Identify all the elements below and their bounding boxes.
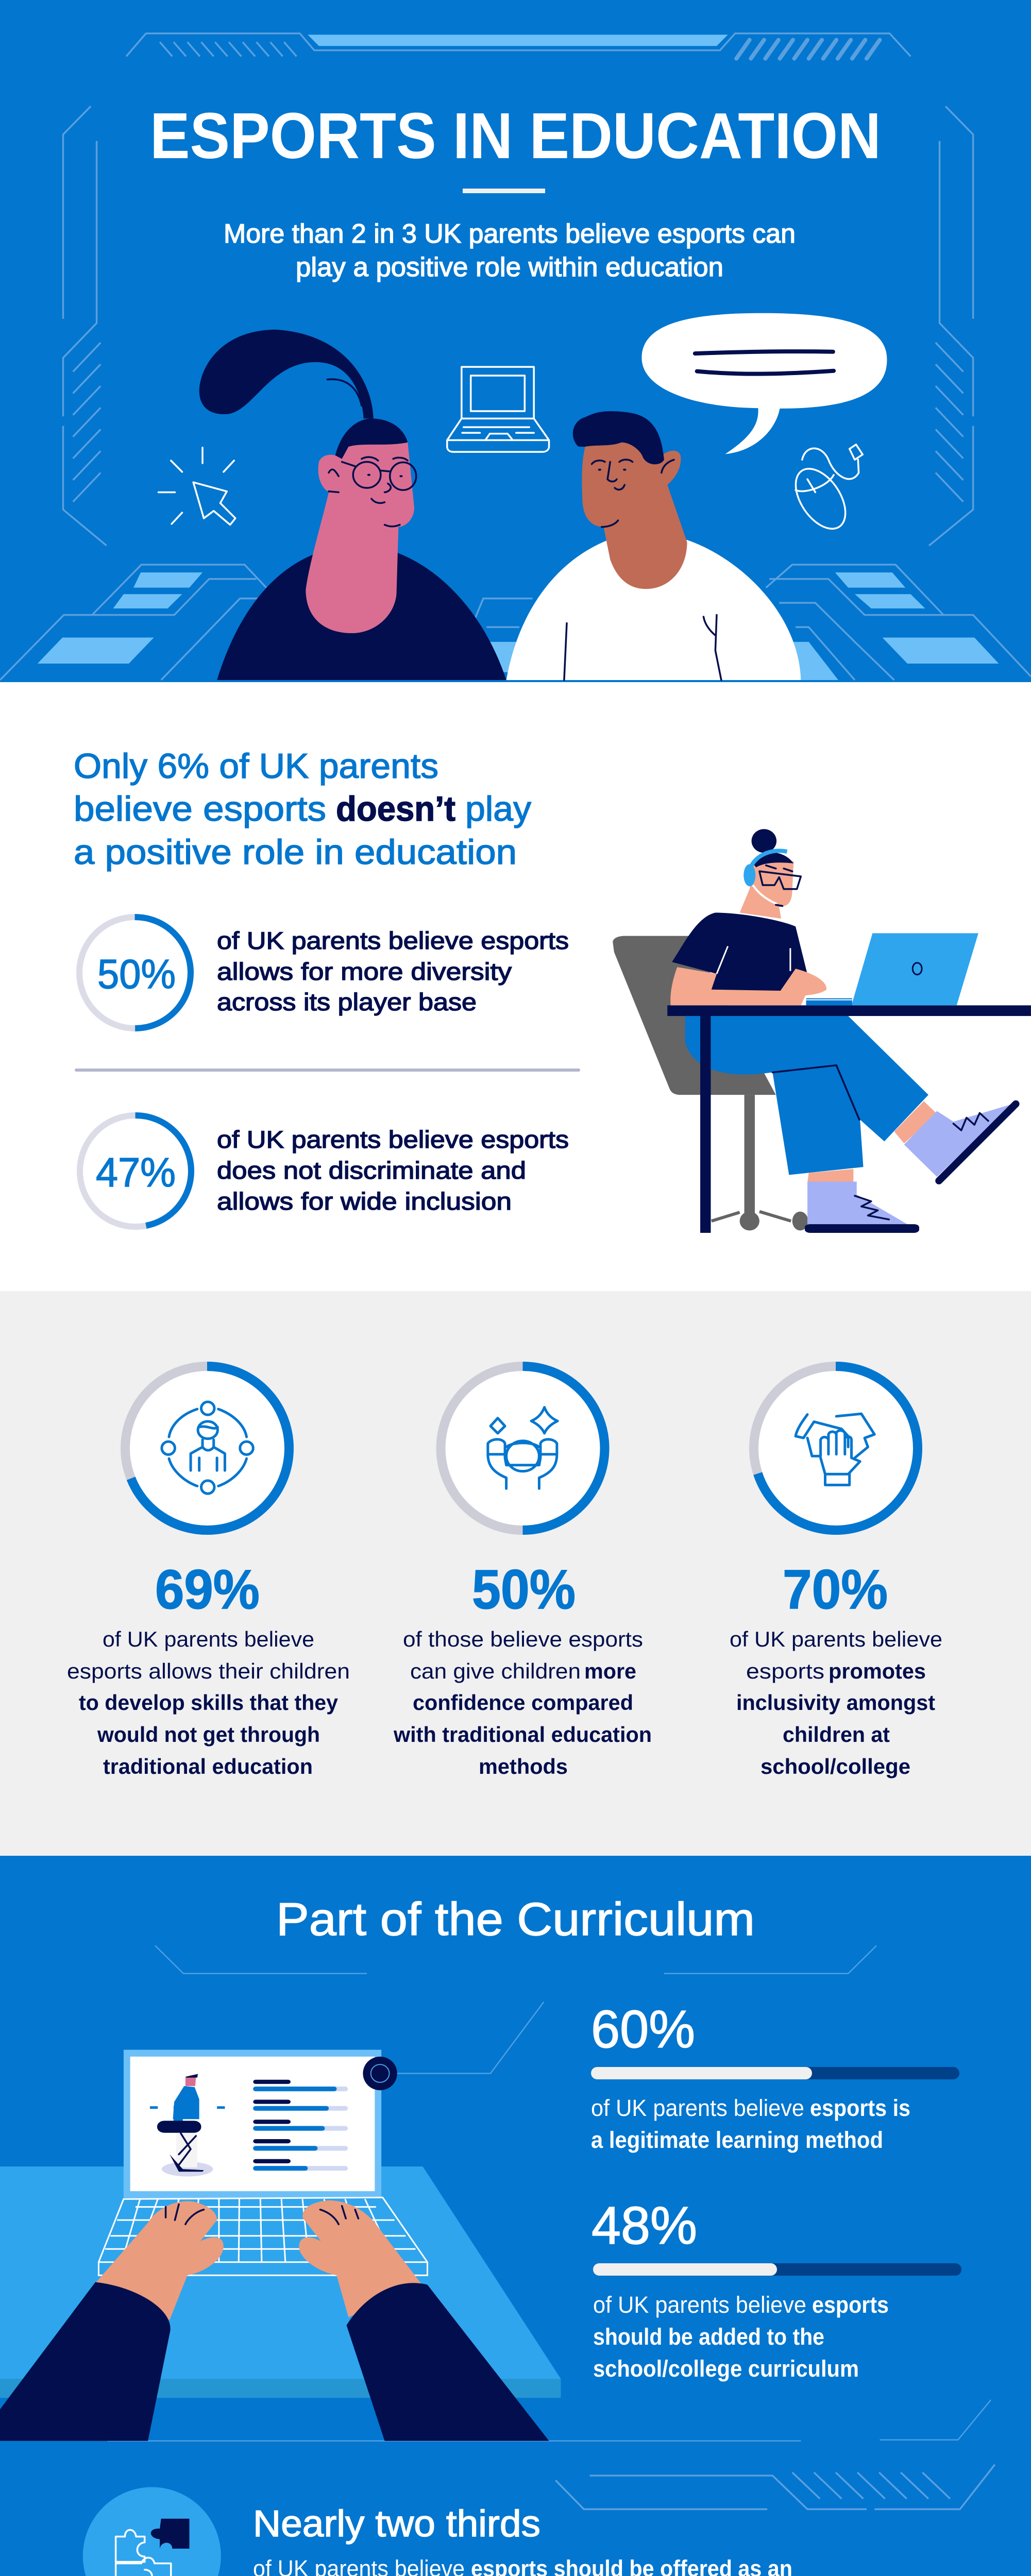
stat: 60% legitimate	[591, 1999, 959, 2153]
panel: header	[0, 0, 1031, 682]
stat: 69% develop skills: 69%	[155, 1558, 260, 1620]
stat: 48% curriculum: 48%	[591, 2196, 697, 2255]
stat: 70% inclusivity: promotes	[829, 1659, 926, 1683]
heading: Part of the Curriculum	[276, 1894, 755, 1945]
heading: believe esports	[74, 789, 326, 828]
stat: 70% inclusivity: esports	[746, 1659, 824, 1683]
stat: 70% inclusivity: children at	[783, 1722, 890, 1747]
icon: mouse	[786, 445, 863, 533]
laptop screen chart	[150, 2057, 397, 2176]
callout: nearly two thirds	[83, 2487, 792, 2576]
icon: laptop	[447, 367, 549, 452]
title underline	[463, 189, 545, 193]
stat: 60% legitimate: of UK parents believe	[591, 2095, 804, 2121]
heading: doesn’t	[336, 789, 455, 828]
heading: a positive role in education	[74, 833, 517, 872]
stat: 69% develop skills: would not get through	[97, 1722, 320, 1747]
stat: 70% inclusivity: of UK parents believe	[730, 1627, 942, 1651]
stat: 47% inclusion: 47%	[96, 1149, 176, 1195]
subtitle: More than 2 in 3 UK parents believe esports can	[224, 219, 796, 249]
heading: Only 6% of UK parents	[74, 747, 438, 786]
stat: 47% inclusion	[80, 1115, 569, 1227]
stat: 48% curriculum: school/college curriculum	[593, 2355, 859, 2382]
stat: 50% diversity	[79, 917, 569, 1028]
illustration: woman with ponytail	[199, 330, 506, 680]
stat: 50% confidence	[393, 1366, 652, 1778]
stat: 47% inclusion: of UK parents believe esports	[217, 1126, 569, 1153]
stat: 50% diversity: across its player base	[217, 988, 477, 1015]
stat: 70% inclusivity: inclusivity amongst	[736, 1690, 935, 1715]
stat: 47% inclusion: does not discriminate and	[217, 1157, 526, 1184]
stat: 60% legitimate: 60%	[591, 1999, 695, 2059]
stat: 50% confidence: methods	[479, 1754, 568, 1778]
heading	[74, 747, 531, 872]
panel: grey stats	[0, 1291, 1031, 1856]
illustration: hands on laptop	[0, 2050, 561, 2441]
illustration: woman at laptop in chair	[613, 829, 1031, 1233]
stat: 50% confidence: of those believe esports	[403, 1627, 643, 1651]
stat: 48% curriculum	[591, 2196, 961, 2382]
stat: 48% curriculum: should be added to the	[593, 2324, 824, 2350]
illustration: man with short hair	[506, 411, 801, 680]
stat: 69% develop skills: traditional education	[103, 1754, 313, 1778]
stat: 47% inclusion: allows for wide inclusion	[217, 1188, 512, 1215]
subtitle	[224, 219, 796, 282]
stat: 69% develop skills: of UK parents believe	[103, 1627, 314, 1651]
icon: person with orbit	[162, 1402, 253, 1494]
stat: 50% confidence: 50%	[472, 1558, 576, 1620]
heading: play	[465, 789, 531, 828]
stat: 69% develop skills: to develop skills that they	[79, 1690, 339, 1715]
speech bubble	[641, 313, 887, 454]
stat: 60% legitimate: esports is	[810, 2095, 910, 2121]
panel: only 6 percent	[74, 747, 1031, 1233]
stat: 69% develop skills	[67, 1366, 350, 1778]
title: ESPORTS IN EDUCATION	[150, 99, 881, 172]
stat: 70% inclusivity: school/college	[760, 1754, 910, 1778]
stat: 50% confidence: confidence compared	[413, 1690, 633, 1715]
icon: puzzle	[83, 2487, 221, 2576]
stat: 70% inclusivity	[730, 1366, 942, 1778]
stat: 70% inclusivity: 70%	[783, 1558, 888, 1620]
stat: 69% develop skills: esports allows their children	[67, 1659, 350, 1683]
subtitle: play a positive role within education	[296, 252, 723, 282]
stat: 50% confidence: more	[584, 1659, 636, 1683]
panel: part of the curriculum	[0, 1856, 1031, 2576]
icon: joined hands	[796, 1414, 874, 1485]
stat: 50% diversity: allows for more diversity	[217, 958, 512, 985]
stat: 48% curriculum: esports	[812, 2292, 889, 2318]
stat: 50% diversity: of UK parents believe esports	[217, 927, 569, 954]
stat: 50% confidence: with traditional education	[393, 1722, 652, 1747]
stat: 50% diversity: 50%	[97, 951, 176, 997]
stat: 50% confidence: can give children	[410, 1659, 581, 1683]
icon: cursor	[159, 448, 235, 525]
stat: 48% curriculum: of UK parents believe	[593, 2292, 806, 2318]
callout: nearly two thirds: Nearly two thirds	[253, 2503, 540, 2545]
icon: confident face with stars	[488, 1407, 557, 1488]
stat: 60% legitimate: a legitimate learning method	[591, 2127, 883, 2153]
